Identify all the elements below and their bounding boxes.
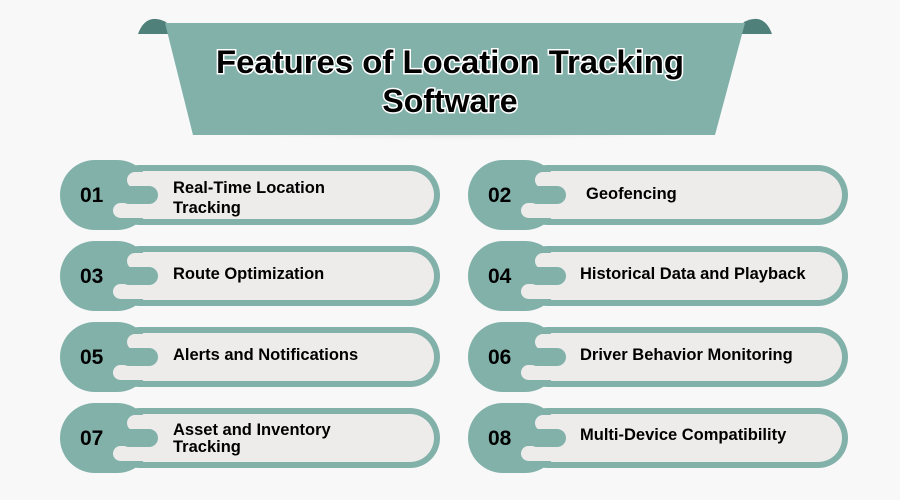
title banner xyxy=(138,19,772,154)
card 02 xyxy=(468,160,848,230)
card 03: Route Optimization xyxy=(173,265,324,283)
card 06: Driver Behavior Monitoring xyxy=(580,346,793,364)
card 01 xyxy=(60,160,440,230)
card 07 xyxy=(60,403,440,473)
card 03 xyxy=(60,241,440,311)
card 02: 02 xyxy=(488,184,511,207)
subtitle line: Software xyxy=(382,83,518,119)
card 01: Tracking xyxy=(173,199,241,217)
card 07: Tracking xyxy=(173,438,241,456)
card 04: 04 xyxy=(488,265,512,288)
card 06 xyxy=(468,322,848,392)
card 05 xyxy=(60,322,440,392)
card 03: 03 xyxy=(80,265,103,288)
card 04: Historical Data and Playback xyxy=(580,265,806,283)
card 02: Geofencing xyxy=(586,185,677,203)
card 07: Asset and Inventory xyxy=(173,421,332,439)
title text: Features of Location Tracking xyxy=(216,44,684,80)
card 07: 07 xyxy=(80,427,103,450)
card 01: 01 xyxy=(80,184,104,207)
card 04 xyxy=(468,241,848,311)
card 05: 05 xyxy=(80,346,104,369)
card 08 xyxy=(468,403,848,473)
card 05: Alerts and Notifications xyxy=(173,346,358,364)
card 08: Multi-Device Compatibility xyxy=(580,426,787,444)
card 01: Real-Time Location xyxy=(173,179,325,197)
card 06: 06 xyxy=(488,346,511,369)
card 08: 08 xyxy=(488,427,512,450)
